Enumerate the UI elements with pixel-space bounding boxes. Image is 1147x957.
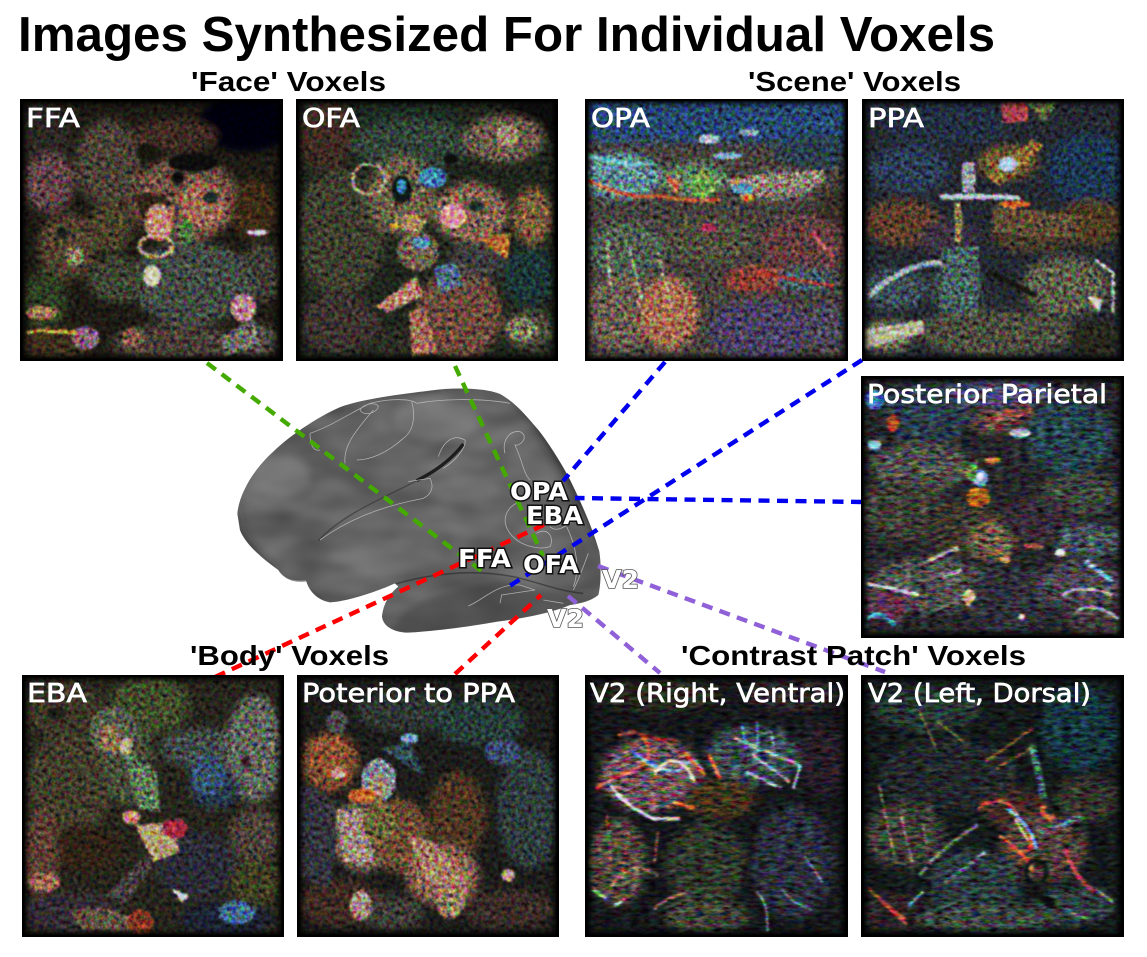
panel: PPA: [862, 99, 1128, 361]
panel label: OFA: [302, 104, 360, 134]
brain region labels: FFA: [458, 544, 512, 573]
panel label: PPA: [868, 104, 924, 134]
brain region labels: V2: [602, 565, 639, 594]
panel label: Posterior Parietal: [867, 380, 1107, 410]
panel label: OPA: [591, 104, 650, 134]
sulcal outline traces: [310, 400, 588, 606]
panel: Poterior to PPA: [297, 675, 563, 937]
title: Images Synthesized For Individual Voxels: [18, 8, 995, 62]
heading: face voxels: 'Face' Voxels: [191, 66, 386, 97]
heading: body voxels: 'Body' Voxels: [190, 640, 389, 671]
connector lines: face voxels (green): [207, 363, 543, 572]
heading: contrast patch voxels: 'Contrast Patch' Voxels: [681, 640, 1026, 671]
panel label: V2 (Left, Dorsal): [868, 679, 1091, 709]
panel: Posterior Parietal: [861, 376, 1126, 638]
panel: FFA: [20, 92, 294, 363]
brain region labels: OFA: [523, 550, 580, 579]
brain region labels: OPA: [510, 477, 569, 506]
panel label: Poterior to PPA: [302, 679, 515, 709]
panel: V2 right ventral: [585, 675, 848, 937]
brain region labels: [458, 477, 639, 633]
panel: OPA: [578, 92, 863, 361]
panel label: FFA: [26, 104, 80, 134]
heading: scene voxels: 'Scene' Voxels: [748, 66, 961, 97]
connector lines: body voxels (red): [215, 522, 550, 677]
brain surface: [237, 388, 601, 633]
panel: V2 left dorsal: [861, 675, 1124, 937]
connector lines: scene voxels (blue): [508, 360, 862, 587]
brain region labels: EBA: [526, 501, 584, 530]
connector lines: contrast patch voxels (purple): [568, 566, 885, 673]
panel label: V2 (Right, Ventral): [590, 679, 845, 709]
panel: EBA: [22, 675, 284, 937]
panel label: EBA: [27, 679, 87, 709]
brain region labels: V2: [547, 604, 584, 633]
panel: OFA: [294, 99, 576, 361]
